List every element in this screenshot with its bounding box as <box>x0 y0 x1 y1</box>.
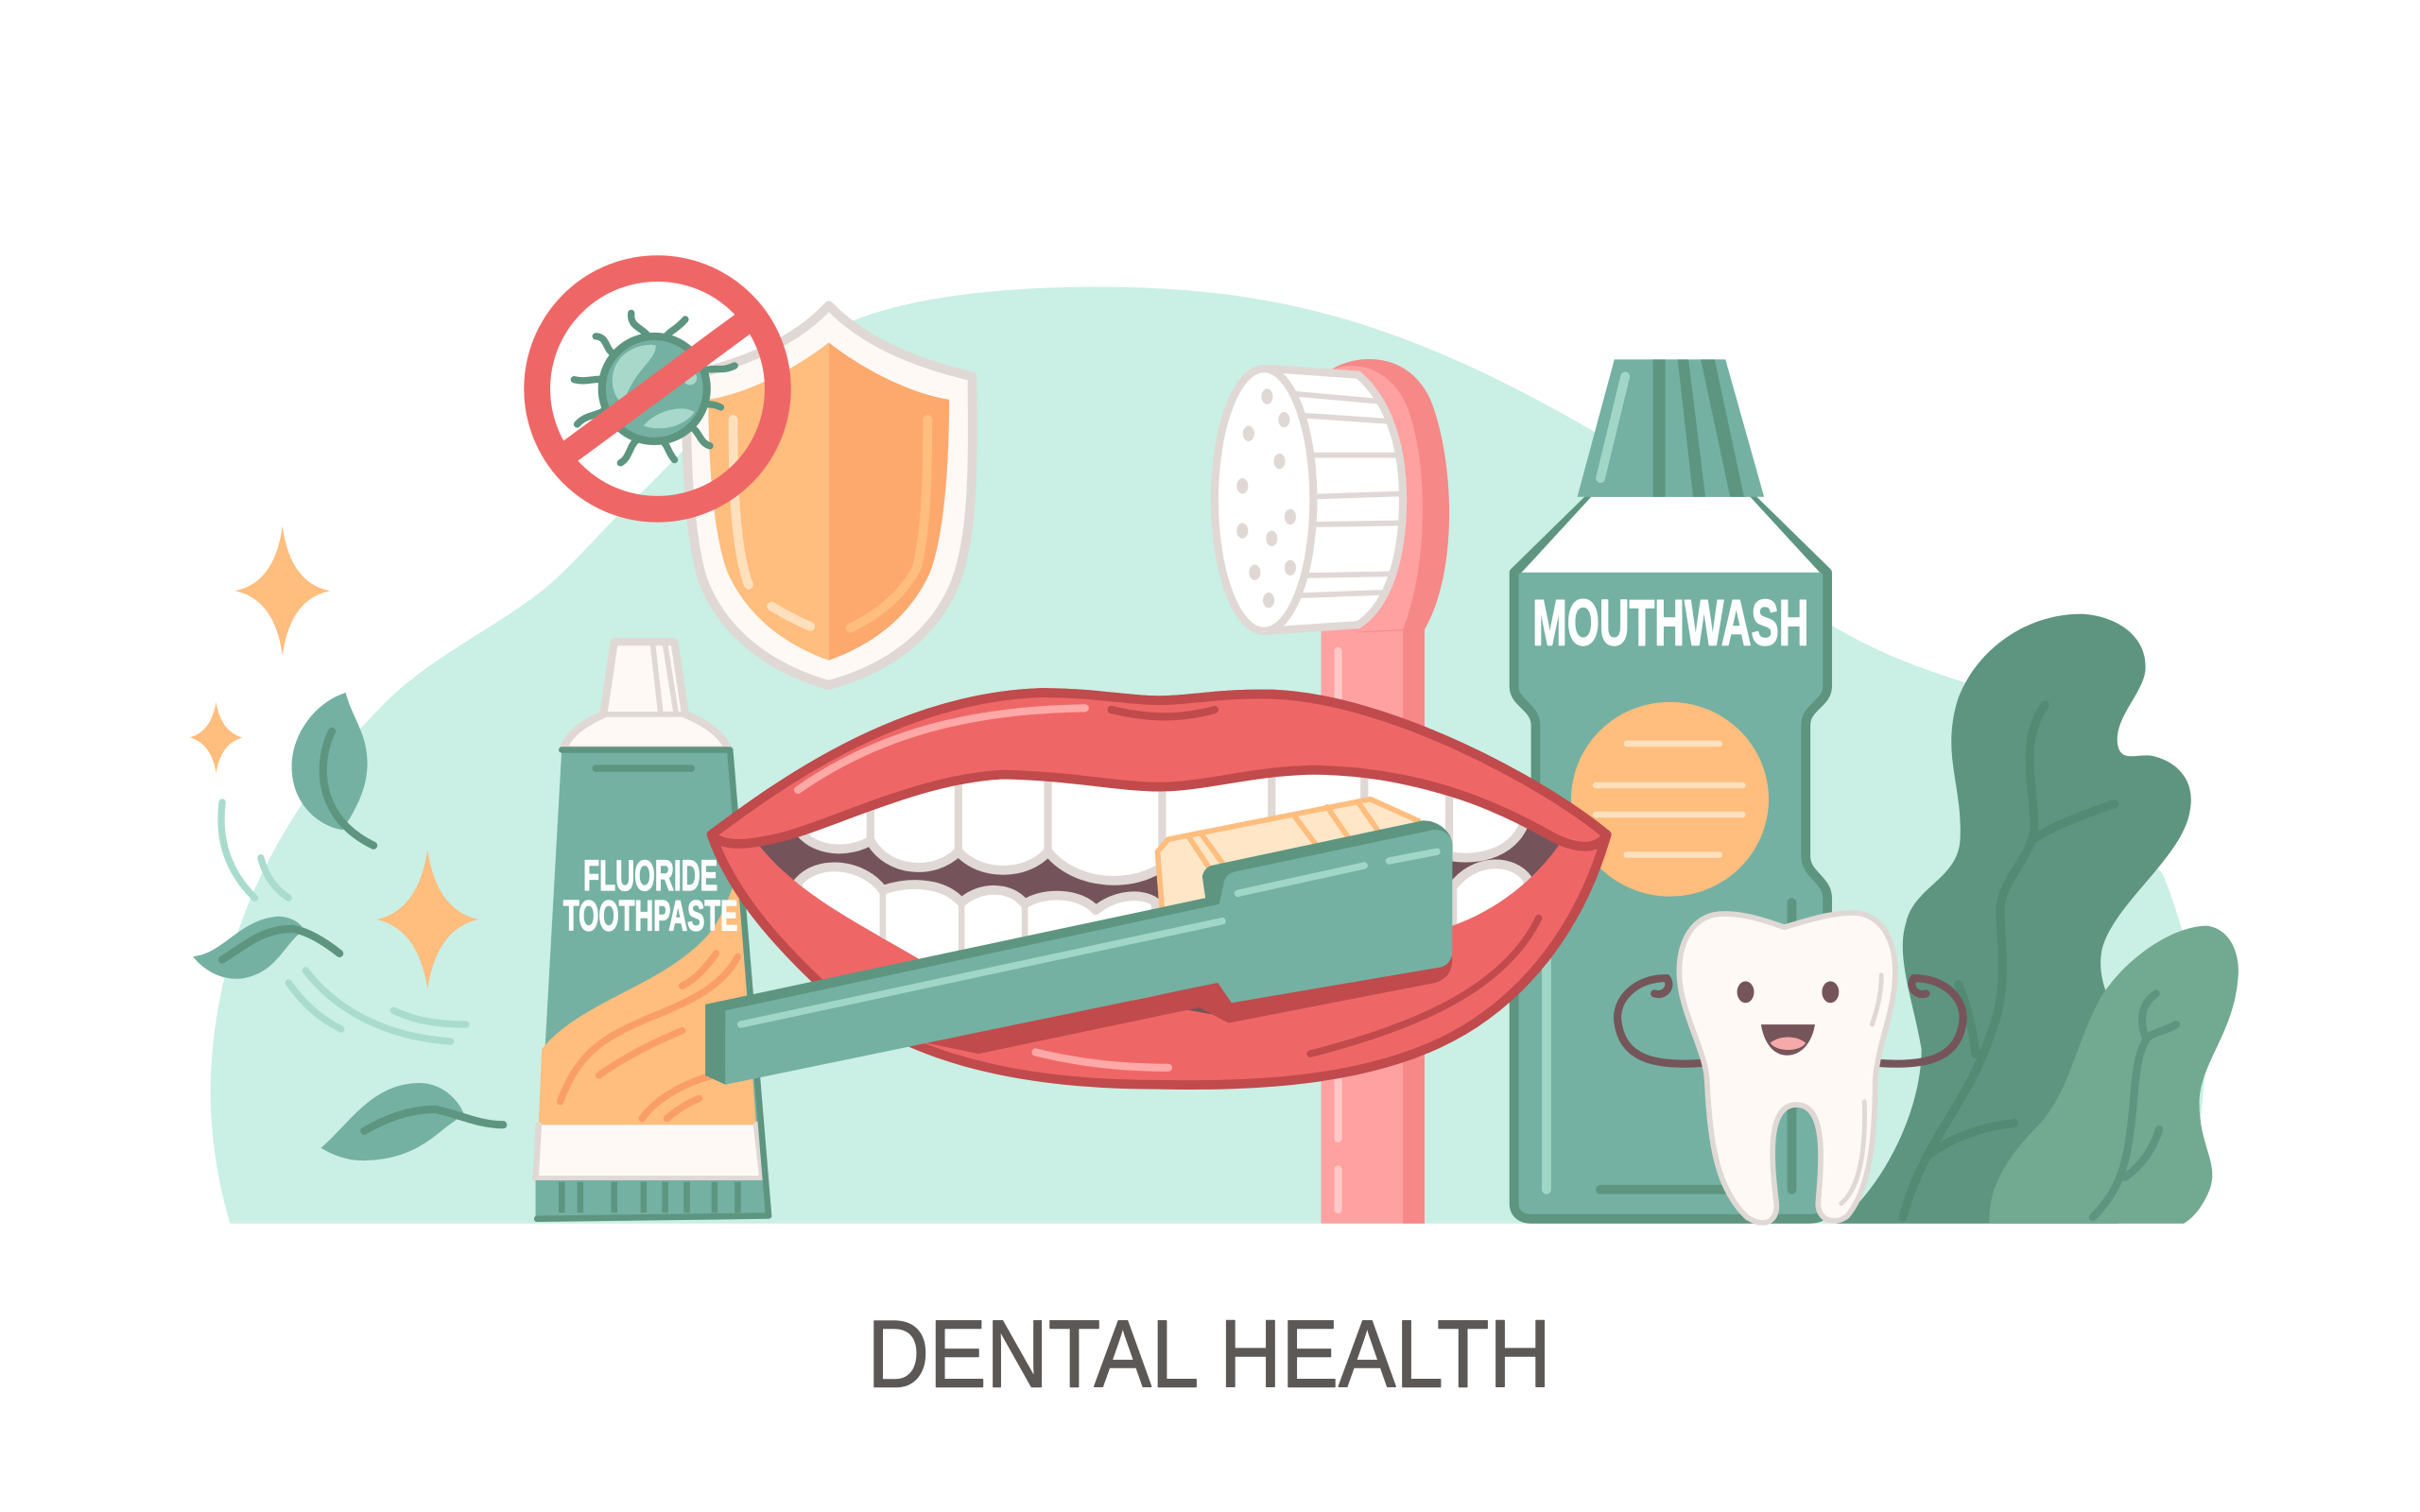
arms <box>1617 978 1963 1064</box>
lower teeth <box>794 860 1531 1000</box>
bristles <box>1215 369 1403 631</box>
mouth interior <box>760 775 1559 1015</box>
germ icon <box>574 313 735 463</box>
motion lines <box>221 802 466 1041</box>
upper teeth <box>798 775 1528 885</box>
upright toothbrush <box>1215 359 1449 1224</box>
mouth with lips and teeth <box>710 693 1636 1085</box>
mouthwash bottle <box>1514 359 1827 1219</box>
label text: MOUTHWASH <box>1532 586 1808 659</box>
shield <box>685 305 973 685</box>
label text: TOOTHPASTE <box>563 891 737 939</box>
background blob <box>211 287 2205 1224</box>
sparkles <box>190 526 478 989</box>
dental health illustration <box>190 255 2238 1387</box>
green toothbrush <box>705 820 1452 1085</box>
orange label <box>1571 702 1769 897</box>
brush shadow on lip <box>926 956 1452 1054</box>
paste on bristles <box>1157 799 1435 910</box>
title: DENTAL HEALTH <box>868 1301 1551 1408</box>
label text <box>563 851 737 939</box>
toothpaste tube <box>536 642 771 1219</box>
smile <box>1761 1024 1815 1056</box>
upper lip <box>712 693 1607 847</box>
leaves left <box>193 693 503 1160</box>
plants right <box>1837 614 2238 1224</box>
tooth character <box>1617 913 1963 1223</box>
no-germs sign <box>537 268 778 509</box>
label text: FLUORIDE <box>583 851 717 900</box>
